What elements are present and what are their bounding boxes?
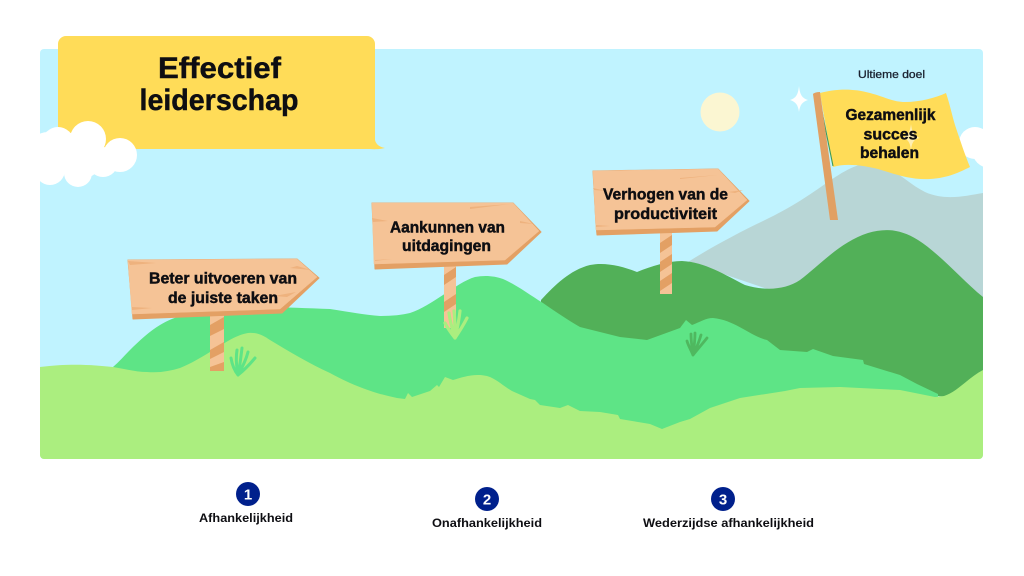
- sun: [700, 92, 740, 132]
- step 2: 2: [483, 492, 491, 508]
- step 1: Afhankelijkheid: [199, 513, 293, 525]
- flag: [813, 90, 970, 220]
- flag: succes: [864, 126, 918, 144]
- sign 1: [128, 259, 319, 319]
- flag: behalen: [860, 145, 919, 162]
- sign 2: [372, 203, 541, 269]
- grass tuft 1: [231, 348, 255, 375]
- title box: leiderschap: [140, 84, 298, 117]
- sign 2: uitdagingen: [402, 238, 491, 255]
- step 3: 3: [719, 492, 727, 508]
- icon: sparkle star: [790, 86, 808, 112]
- grass tuft 2: [445, 311, 467, 338]
- cloud: right: [960, 127, 983, 166]
- flag pole: [813, 92, 838, 220]
- sign 1 text: Beter uitvoeren van: [149, 270, 297, 288]
- cloud: left: [40, 121, 137, 187]
- sign post 2: [444, 262, 456, 328]
- flag sparkle: [902, 124, 920, 150]
- sky: [40, 49, 983, 459]
- mountain: grey: [688, 163, 983, 300]
- step 1: [199, 482, 293, 525]
- hill: light green foreground: [40, 333, 983, 459]
- grass tuft 3: [687, 333, 707, 355]
- sign 3 text: Verhogen van de: [603, 186, 728, 204]
- sign 1: de juiste taken: [168, 290, 278, 307]
- hill: mid green: [113, 276, 938, 440]
- sign 3: productiviteit: [614, 206, 717, 223]
- sign post 1: [210, 312, 224, 371]
- infographic: [40, 36, 983, 530]
- sign post 3: [660, 230, 672, 294]
- title box: [58, 36, 385, 149]
- title text: Effectief: [158, 52, 282, 85]
- step 2: [432, 487, 542, 530]
- hill: dark green: [541, 230, 983, 400]
- step 2: Onafhankelijkheid: [432, 518, 542, 530]
- sign 3: [593, 169, 749, 235]
- flag cloth: [820, 90, 970, 179]
- sign 2 text: Aankunnen van: [390, 220, 505, 236]
- step 3: Wederzijdse afhankelijkheid: [643, 518, 814, 530]
- panel: landscape scene: [40, 49, 1008, 459]
- step 3: [643, 487, 814, 530]
- flag text: Gezamenlijk: [846, 107, 936, 124]
- goal label: Ultieme doel: [858, 69, 925, 81]
- step 1: 1: [244, 486, 252, 504]
- flag hem: [819, 97, 833, 166]
